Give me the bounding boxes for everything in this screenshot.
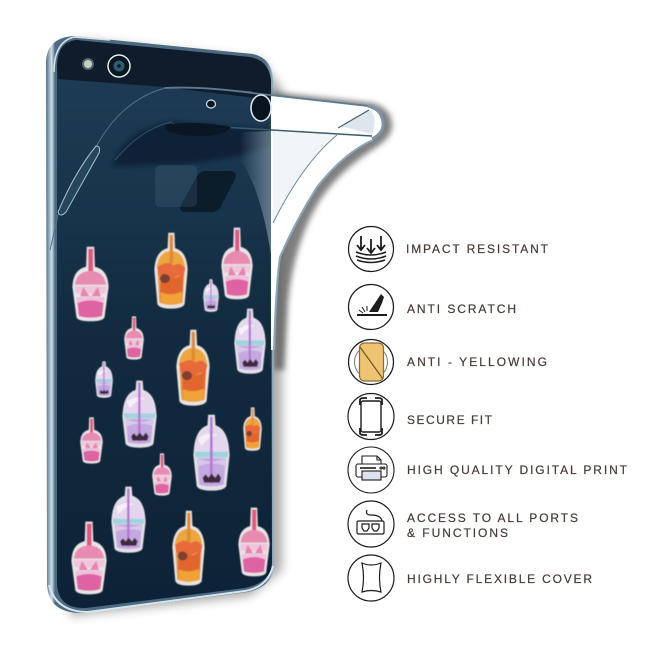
feature: highly flexible cover <box>348 555 592 601</box>
cup: pink <box>221 228 253 299</box>
cup: pink <box>71 522 107 594</box>
speaker slot in case <box>165 123 231 136</box>
label: ANTI - YELLOWING <box>407 355 547 369</box>
case inner curved edge <box>273 135 337 223</box>
cup: orange <box>176 330 210 406</box>
first line: ACCESS TO ALL PORTS <box>407 511 578 525</box>
case side button bulge <box>58 146 100 215</box>
peeled case clear area <box>271 95 382 350</box>
case shade under lip <box>112 122 272 166</box>
sensor reflection <box>155 165 197 207</box>
feature: anti scratch <box>348 284 516 330</box>
cup: small lilac <box>95 361 113 398</box>
camera <box>108 55 130 77</box>
dark glass band at top <box>57 40 271 100</box>
peeled case shadow <box>272 92 392 370</box>
fingerprint sensor window <box>180 171 236 212</box>
flash <box>82 58 94 70</box>
icon: impact arrows <box>348 226 394 272</box>
case camera cut-out <box>251 95 271 121</box>
cup: orange <box>154 233 188 309</box>
feature list <box>348 226 628 601</box>
case top edge highlight <box>165 88 368 106</box>
cup: lilac <box>234 309 266 374</box>
feature: access to all ports <box>348 501 578 547</box>
cup: lilac <box>193 415 230 491</box>
feature: anti yellowing <box>348 340 547 384</box>
lower tint of case <box>273 131 337 223</box>
boba cup pattern <box>71 228 270 594</box>
corner diagonal <box>338 110 369 128</box>
cup: small pink <box>152 453 172 496</box>
icon: blade scratching <box>348 284 394 330</box>
phone rim <box>46 36 274 613</box>
second line: & FUNCTIONS <box>407 526 508 540</box>
cup: orange <box>172 511 205 586</box>
label: SECURE FIT <box>407 413 493 427</box>
case corner <box>368 106 383 139</box>
phone shadow <box>70 40 282 616</box>
cup: pink <box>238 508 270 576</box>
right side highlight <box>272 350 274 565</box>
label: HIGHLY FLEXIBLE COVER <box>407 572 592 586</box>
phone back panel <box>57 40 272 608</box>
feature: high quality digital print <box>348 447 628 493</box>
cup: small lilac <box>203 279 219 312</box>
bottom case highlight <box>49 566 273 612</box>
label <box>407 511 578 540</box>
cup: lilac <box>122 381 157 448</box>
icon: yellow phone crossed <box>348 340 394 384</box>
icon: ports <box>348 501 394 547</box>
cup: small pink <box>80 417 103 464</box>
cup: small pink <box>124 316 144 360</box>
icon: phone case outline <box>348 394 394 440</box>
end tint of case <box>340 110 375 134</box>
case inner lip <box>172 124 372 136</box>
peeled case arc <box>50 88 252 250</box>
label: ANTI SCRATCH <box>407 302 516 316</box>
phone with clear case <box>46 36 392 616</box>
cup: lilac <box>111 487 146 553</box>
case mic hole <box>206 100 216 108</box>
feature: secure fit <box>348 394 493 440</box>
icon: flexible sheet <box>348 555 394 601</box>
feature: impact resistant <box>348 226 549 272</box>
glass highlight at right <box>240 131 272 262</box>
icon: printer <box>348 447 394 493</box>
label: IMPACT RESISTANT <box>406 242 549 256</box>
inner lip fade <box>115 122 172 160</box>
cup: small orange <box>243 407 262 451</box>
label: HIGH QUALITY DIGITAL PRINT <box>407 463 628 477</box>
cup: pink <box>72 247 109 321</box>
top left rim highlight <box>54 37 110 72</box>
case curved edge <box>274 140 373 350</box>
